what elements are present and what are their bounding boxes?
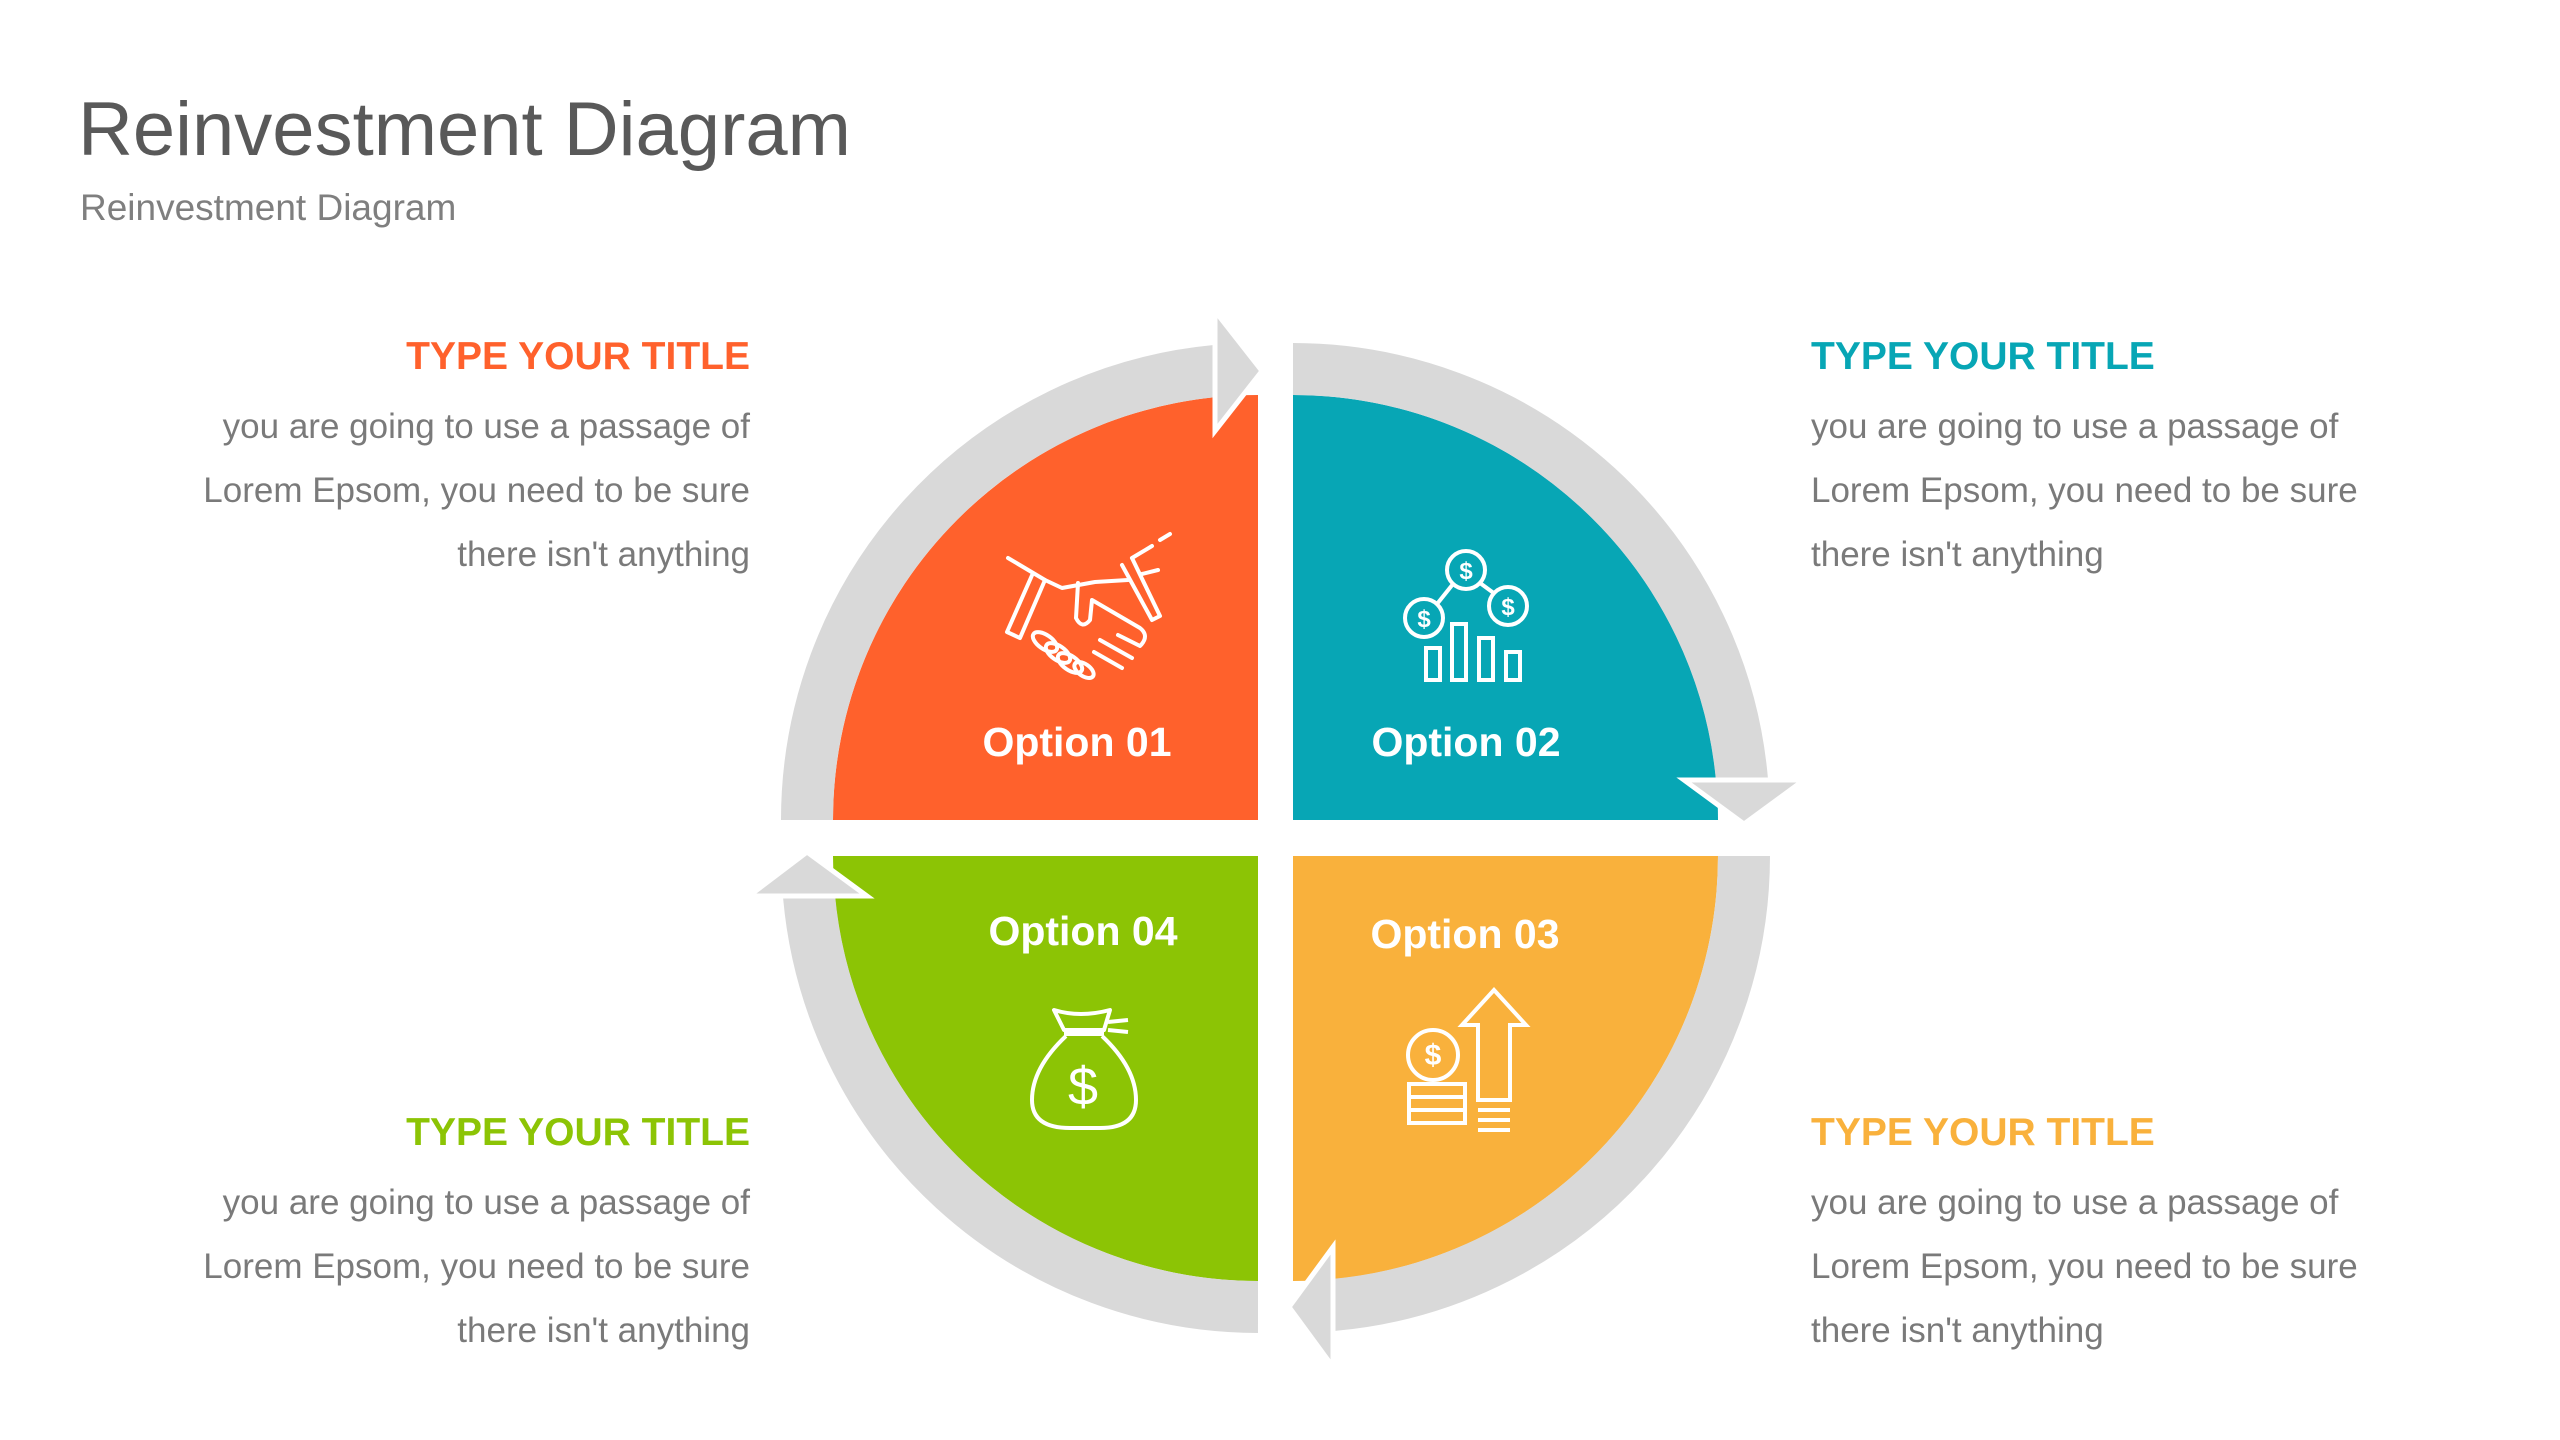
body: bottom-right <box>1811 1183 2358 1350</box>
quadrant: option 02: $ <box>1501 594 1515 621</box>
quadrant: option 04: $ <box>1068 1057 1098 1117</box>
quadrant: option 03: $ <box>1425 1039 1442 1072</box>
body: bottom-right: there isn't anything <box>1811 1311 2104 1350</box>
quadrant: option 03 <box>1289 856 1744 1367</box>
label: option 02: Option 02 <box>1371 719 1561 765</box>
body: bottom-left: there isn't anything <box>457 1311 750 1350</box>
subtitle: Reinvestment Diagram <box>80 187 456 228</box>
body: top-right: Lorem Epsom, you need to be sure <box>1811 471 2358 510</box>
quadrant: option 02 <box>1293 369 1804 824</box>
icon: coins with arrow <box>1408 990 1526 1130</box>
body: top-left: Lorem Epsom, you need to be sure <box>203 471 750 510</box>
body: bottom-left <box>203 1183 750 1350</box>
heading: bottom-left: TYPE YOUR TITLE <box>406 1111 750 1154</box>
body: top-left: you are going to use a passage of <box>223 407 750 446</box>
arc arrow: option 02 <box>1293 369 1804 824</box>
arc arrow: option 01 <box>807 311 1262 820</box>
body: top-right: you are going to use a passage of <box>1811 407 2338 446</box>
text block: top-left <box>203 335 750 574</box>
body: bottom-right: Lorem Epsom, you need to be sure <box>1811 1247 2358 1286</box>
body: top-left: there isn't anything <box>457 535 750 574</box>
arc arrow: option 03 <box>1289 856 1744 1367</box>
body: bottom-left: Lorem Epsom, you need to be sure <box>203 1247 750 1286</box>
heading: top-left: TYPE YOUR TITLE <box>406 335 750 378</box>
heading: top-right: TYPE YOUR TITLE <box>1811 335 2155 378</box>
body: bottom-left: you are going to use a passage of <box>223 1183 750 1222</box>
label: option 04: Option 04 <box>988 908 1178 954</box>
text block: top-right <box>1811 335 2358 574</box>
body: top-left <box>203 407 750 574</box>
text block: bottom-left <box>203 1111 750 1350</box>
icon: handshake <box>1007 534 1170 681</box>
body: top-right <box>1811 407 2358 574</box>
title: Reinvestment Diagram <box>78 87 851 172</box>
text block: bottom-right <box>1811 1111 2358 1350</box>
heading: bottom-right: TYPE YOUR TITLE <box>1811 1111 2155 1154</box>
quadrant: option 04 <box>749 852 1258 1307</box>
body: top-right: there isn't anything <box>1811 535 2104 574</box>
label: option 03: Option 03 <box>1370 911 1560 957</box>
icon: coins network chart <box>1405 551 1527 680</box>
quadrant: option 01 <box>807 311 1262 820</box>
quadrant: option 02: $ <box>1459 558 1473 585</box>
arc arrow: option 04 <box>749 852 1258 1307</box>
quadrant: option 02: $ <box>1417 606 1431 633</box>
icon: money bag <box>1032 1010 1136 1128</box>
body: bottom-right: you are going to use a passage of <box>1811 1183 2338 1222</box>
label: option 01: Option 01 <box>982 719 1172 765</box>
